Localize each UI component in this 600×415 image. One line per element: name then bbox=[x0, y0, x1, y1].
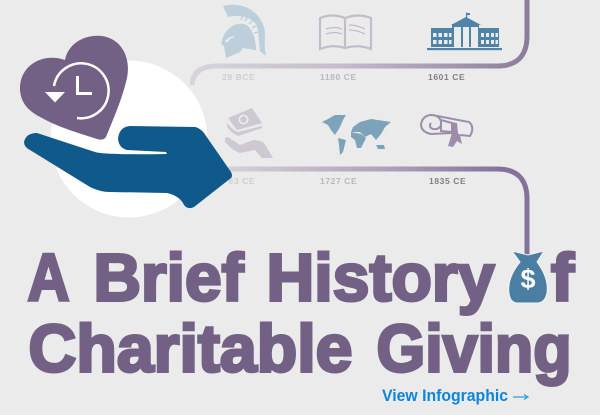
title word: A: A bbox=[28, 240, 70, 316]
label: 1727 CE: 1727 CE bbox=[320, 176, 357, 186]
label: 1601 CE: 1601 CE bbox=[428, 72, 465, 82]
icon: money bag: $ bbox=[520, 264, 536, 294]
icon: spartan helmet bbox=[221, 5, 266, 58]
label: 28 BCE: 28 BCE bbox=[222, 72, 255, 82]
label: date partly hidden by hand: 63 CE bbox=[228, 176, 255, 186]
label: 1180 CE: 1180 CE bbox=[320, 72, 357, 82]
icon: money bag bbox=[509, 251, 547, 303]
label: 1835 CE: 1835 CE bbox=[429, 176, 466, 186]
icon: open book bbox=[320, 16, 371, 49]
title bbox=[28, 240, 575, 386]
date labels bbox=[222, 72, 466, 186]
lower timeline path bbox=[228, 169, 527, 256]
icon: money over hand bbox=[225, 108, 273, 158]
icon: white house bbox=[427, 12, 502, 50]
title word: Charitable: Charitable bbox=[28, 312, 352, 386]
upper timeline path bbox=[192, 0, 527, 85]
icon: heart with clock bbox=[20, 36, 128, 140]
icon: giving hand bbox=[24, 126, 232, 208]
title word: Giving: Giving bbox=[376, 312, 572, 386]
link: view infographic: View Infographic bbox=[382, 386, 508, 405]
icon: diploma scroll bbox=[421, 115, 472, 147]
title word: Brief: Brief bbox=[94, 240, 244, 316]
title word: History: History bbox=[266, 240, 494, 316]
icon: world map bbox=[322, 115, 391, 155]
title letter f: f bbox=[551, 240, 575, 316]
white circle bbox=[50, 60, 208, 218]
